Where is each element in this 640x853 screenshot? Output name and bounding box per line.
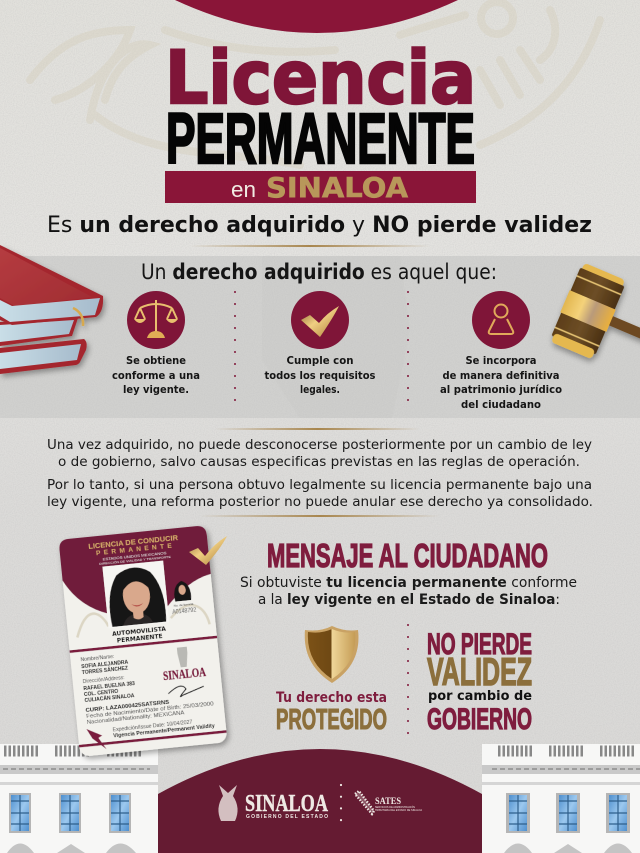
item text 3: de manera definitiva <box>442 370 560 382</box>
building: left <box>0 744 158 853</box>
heading: derecho adquirido: Un derecho adquirido es aquel que: <box>141 260 497 284</box>
footer arc <box>158 749 482 853</box>
title: Licencia: Licencia <box>165 36 476 121</box>
label: tu derecho esta protegido: PROTEGIDO <box>276 704 387 736</box>
card data: Expedición/Issue Date: 10/04/2027 <box>112 719 193 733</box>
label: no pierde validez: VALIDEZ <box>427 651 532 694</box>
title bar: en Sinaloa <box>165 171 476 204</box>
footer logo: SATES: TRIBUTARIA DEL ESTADO DE SINALOA <box>375 808 422 812</box>
icon: check <box>291 291 349 349</box>
building: right <box>482 744 640 853</box>
dotted divider <box>407 625 409 734</box>
card heading <box>88 533 181 567</box>
card heading: PERMANENTE <box>96 543 173 557</box>
footer logo: Sinaloa: SINALOA <box>245 791 329 817</box>
item text 2 <box>264 355 376 396</box>
label: no pierde validez <box>427 628 532 736</box>
card category <box>112 625 167 645</box>
label: no pierde validez: NO PIERDE <box>427 628 532 661</box>
footer logo: Sinaloa <box>218 785 329 821</box>
item text 1: ley vigente. <box>123 384 189 396</box>
card data: Fecha de Nacimiento/Date of Birth: 25/03/2000 <box>86 701 214 720</box>
card data: Nacionalidad/Nationality: MEXICANA <box>87 710 185 726</box>
card data: CULIACÁN SINALOA <box>84 692 135 704</box>
title bar: en Sinaloa: SINALOA <box>266 171 408 204</box>
dotted divider <box>407 292 409 402</box>
item text 2: Cumple con <box>286 355 354 367</box>
card data: TORRES SÁNCHEZ <box>82 665 128 676</box>
label: tu derecho esta protegido: Tu derecho esta <box>276 690 387 706</box>
card small photo <box>169 580 197 616</box>
card data: Vigencia Permanente/Permanent Validity <box>113 723 215 739</box>
card check mark <box>189 536 227 565</box>
label: no pierde validez: por cambio de <box>428 689 532 704</box>
icon: shield <box>305 626 358 683</box>
item text 1: conforme a una <box>112 370 200 382</box>
message text <box>240 575 577 608</box>
card data: SOFIA ALEJANDRA <box>81 660 129 670</box>
license card <box>59 525 227 757</box>
top arc <box>175 0 458 33</box>
card Sinaloa logo: SINALOA <box>162 665 207 683</box>
item text 2: legales. <box>300 384 340 396</box>
paragraph 2: ley vigente, una reforma posterior no puede anular ese derecho ya consolidado. <box>47 495 593 510</box>
footer logo: Sinaloa: GOBIERNO DEL ESTADO <box>246 814 328 820</box>
card Sinaloa logo <box>160 645 208 698</box>
item text 1: Se obtiene <box>126 355 186 367</box>
item text 3: Se incorpora <box>466 355 536 367</box>
item text 3: al patrimonio jurídico <box>440 384 562 396</box>
card data <box>80 645 216 742</box>
card data: Nombre/Name: <box>80 654 115 663</box>
item text 1 <box>112 355 200 396</box>
card data: CURP: LAZA000425SATSRNS <box>85 700 170 714</box>
label: tu derecho esta protegido <box>276 690 387 736</box>
icon: scales <box>127 291 185 349</box>
card heading: LICENCIA DE CONDUCIR <box>88 533 179 551</box>
card small photo: No. de licencia <box>174 602 194 608</box>
illustration: gavel <box>548 262 640 381</box>
label: no pierde validez: GOBIERNO <box>427 703 532 736</box>
illustration: books <box>0 245 103 374</box>
paragraph 2 <box>47 478 593 510</box>
item text 3 <box>440 355 562 411</box>
card photo <box>102 561 169 628</box>
paragraph 1 <box>47 438 592 470</box>
message text: Si obtuviste tu licencia permanente conforme <box>240 575 577 591</box>
card category: AUTOMOVILISTA <box>112 625 166 638</box>
subtitle: Es un derecho adquirido y NO pierde validez <box>47 213 592 238</box>
message text: a la ley vigente en el Estado de Sinaloa: <box>258 592 560 608</box>
card small photo: A0148792 <box>172 607 197 616</box>
card data: COL. CENTRO <box>84 689 119 698</box>
paragraph 1: Una vez adquirido, no puede desconocerse posteriormente por un cambio de ley <box>47 438 592 453</box>
footer logo: SATES <box>355 791 422 814</box>
card category: PERMANENTE <box>116 632 163 645</box>
background emblem <box>30 2 600 165</box>
card data: RAFAEL BUELNA 383 <box>83 681 135 692</box>
footer logo: SATES: SATES <box>375 797 401 807</box>
card heading: DIRECCIÓN DE VIALIDAD Y TRANSPORTE <box>99 554 171 566</box>
dotted divider <box>234 292 236 402</box>
item text 3: del ciudadano <box>461 399 541 411</box>
card heading: ESTADOS UNIDOS MEXICANOS <box>103 551 167 562</box>
paragraph 1: o de gobierno, salvo causas especificas previstas en las reglas de operación. <box>58 455 580 470</box>
card data: Dirección/Address: <box>82 675 125 685</box>
footer logo: SATES: SERVICIOS DE ADMINISTRACIÓN <box>375 804 415 809</box>
item text 2: todos los requisitos <box>264 370 376 382</box>
footer dotted divider <box>340 785 342 821</box>
paragraph 2: Por lo tanto, si una persona obtuvo legalmente su licencia permanente bajo una <box>47 478 592 493</box>
title bar: en Sinaloa: en <box>231 177 256 202</box>
icon: person <box>472 291 530 349</box>
